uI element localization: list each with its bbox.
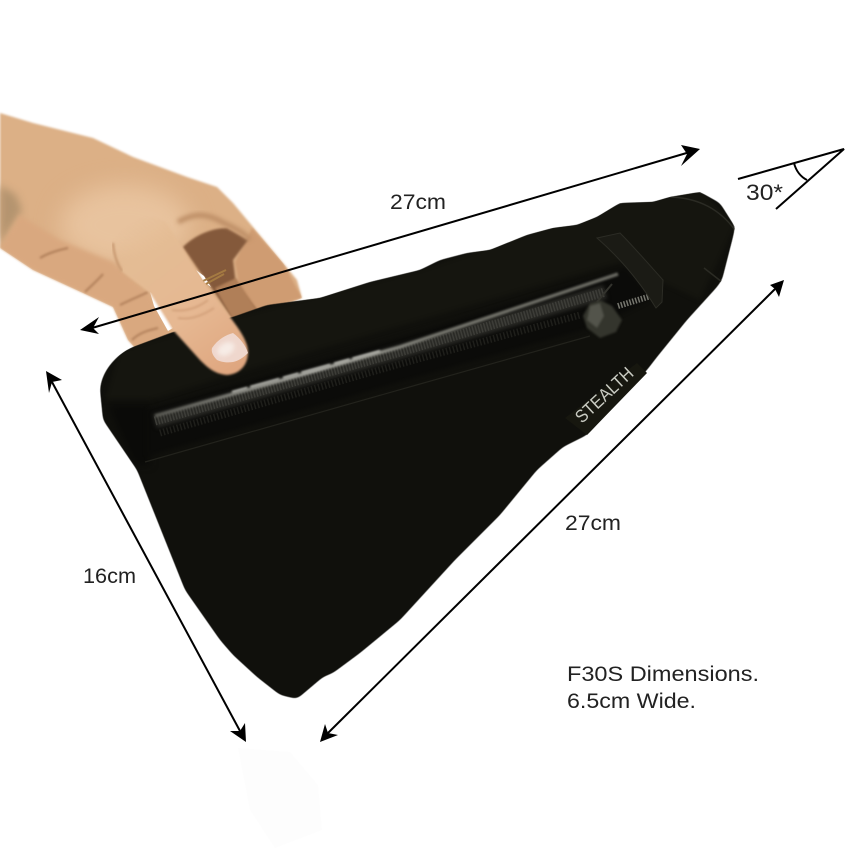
label: top length: 27cm xyxy=(390,191,446,214)
left corner shadow xyxy=(122,447,136,468)
zipper soft base xyxy=(155,292,605,421)
back finger xyxy=(235,228,302,312)
palm interior shadow xyxy=(183,228,257,318)
angle diagram xyxy=(738,149,844,209)
wrist shadow xyxy=(0,185,22,245)
infographic: bag dimensions xyxy=(0,112,845,742)
nail highlight xyxy=(215,339,237,359)
caption xyxy=(567,663,759,713)
arrow: left 16cm xyxy=(46,371,246,742)
zipper pull cord xyxy=(597,284,612,302)
crease between finger and hand xyxy=(113,243,122,271)
light on back of hand xyxy=(60,185,190,265)
zipper end section xyxy=(618,296,651,306)
caption: F30S Dimensions. xyxy=(567,663,759,686)
zipper band xyxy=(147,268,652,456)
hand silhouette xyxy=(0,113,302,350)
zipper dot rows xyxy=(155,292,605,421)
finger joint crease xyxy=(172,300,214,319)
zipper pull highlight xyxy=(587,303,604,328)
lower palm interior xyxy=(215,278,257,318)
background ghost shape xyxy=(238,748,322,848)
label: right length: 27cm xyxy=(565,512,621,535)
zipper sheen xyxy=(155,274,618,416)
stealth label xyxy=(565,363,647,435)
knuckle shading xyxy=(178,215,250,240)
bag body xyxy=(100,192,735,699)
finger xyxy=(113,218,248,375)
index finger over the bag xyxy=(113,218,248,375)
label: angle: 30* xyxy=(746,180,783,205)
gap near ring xyxy=(196,270,211,287)
lower zipper dot rows xyxy=(160,315,580,433)
bag xyxy=(100,190,735,699)
arrow: top 27cm xyxy=(80,145,700,334)
nail xyxy=(212,333,248,362)
zipper bright glint xyxy=(232,351,380,392)
side seam xyxy=(670,197,735,282)
ring xyxy=(203,270,226,284)
finger creases xyxy=(40,248,158,340)
gap between fingers xyxy=(150,292,173,331)
hand behind the bag xyxy=(0,113,302,350)
label tab xyxy=(565,363,647,435)
strap over zipper xyxy=(597,233,663,308)
upper panel tone xyxy=(114,192,735,360)
caption: 6.5cm Wide. xyxy=(567,690,696,713)
arrow: right 27cm xyxy=(320,280,784,742)
label text: STEALTH xyxy=(571,363,637,427)
label: left length: 16cm xyxy=(83,565,136,588)
lower fingers xyxy=(0,234,136,346)
lower flap seam xyxy=(145,336,590,462)
zipper pull xyxy=(583,300,622,338)
